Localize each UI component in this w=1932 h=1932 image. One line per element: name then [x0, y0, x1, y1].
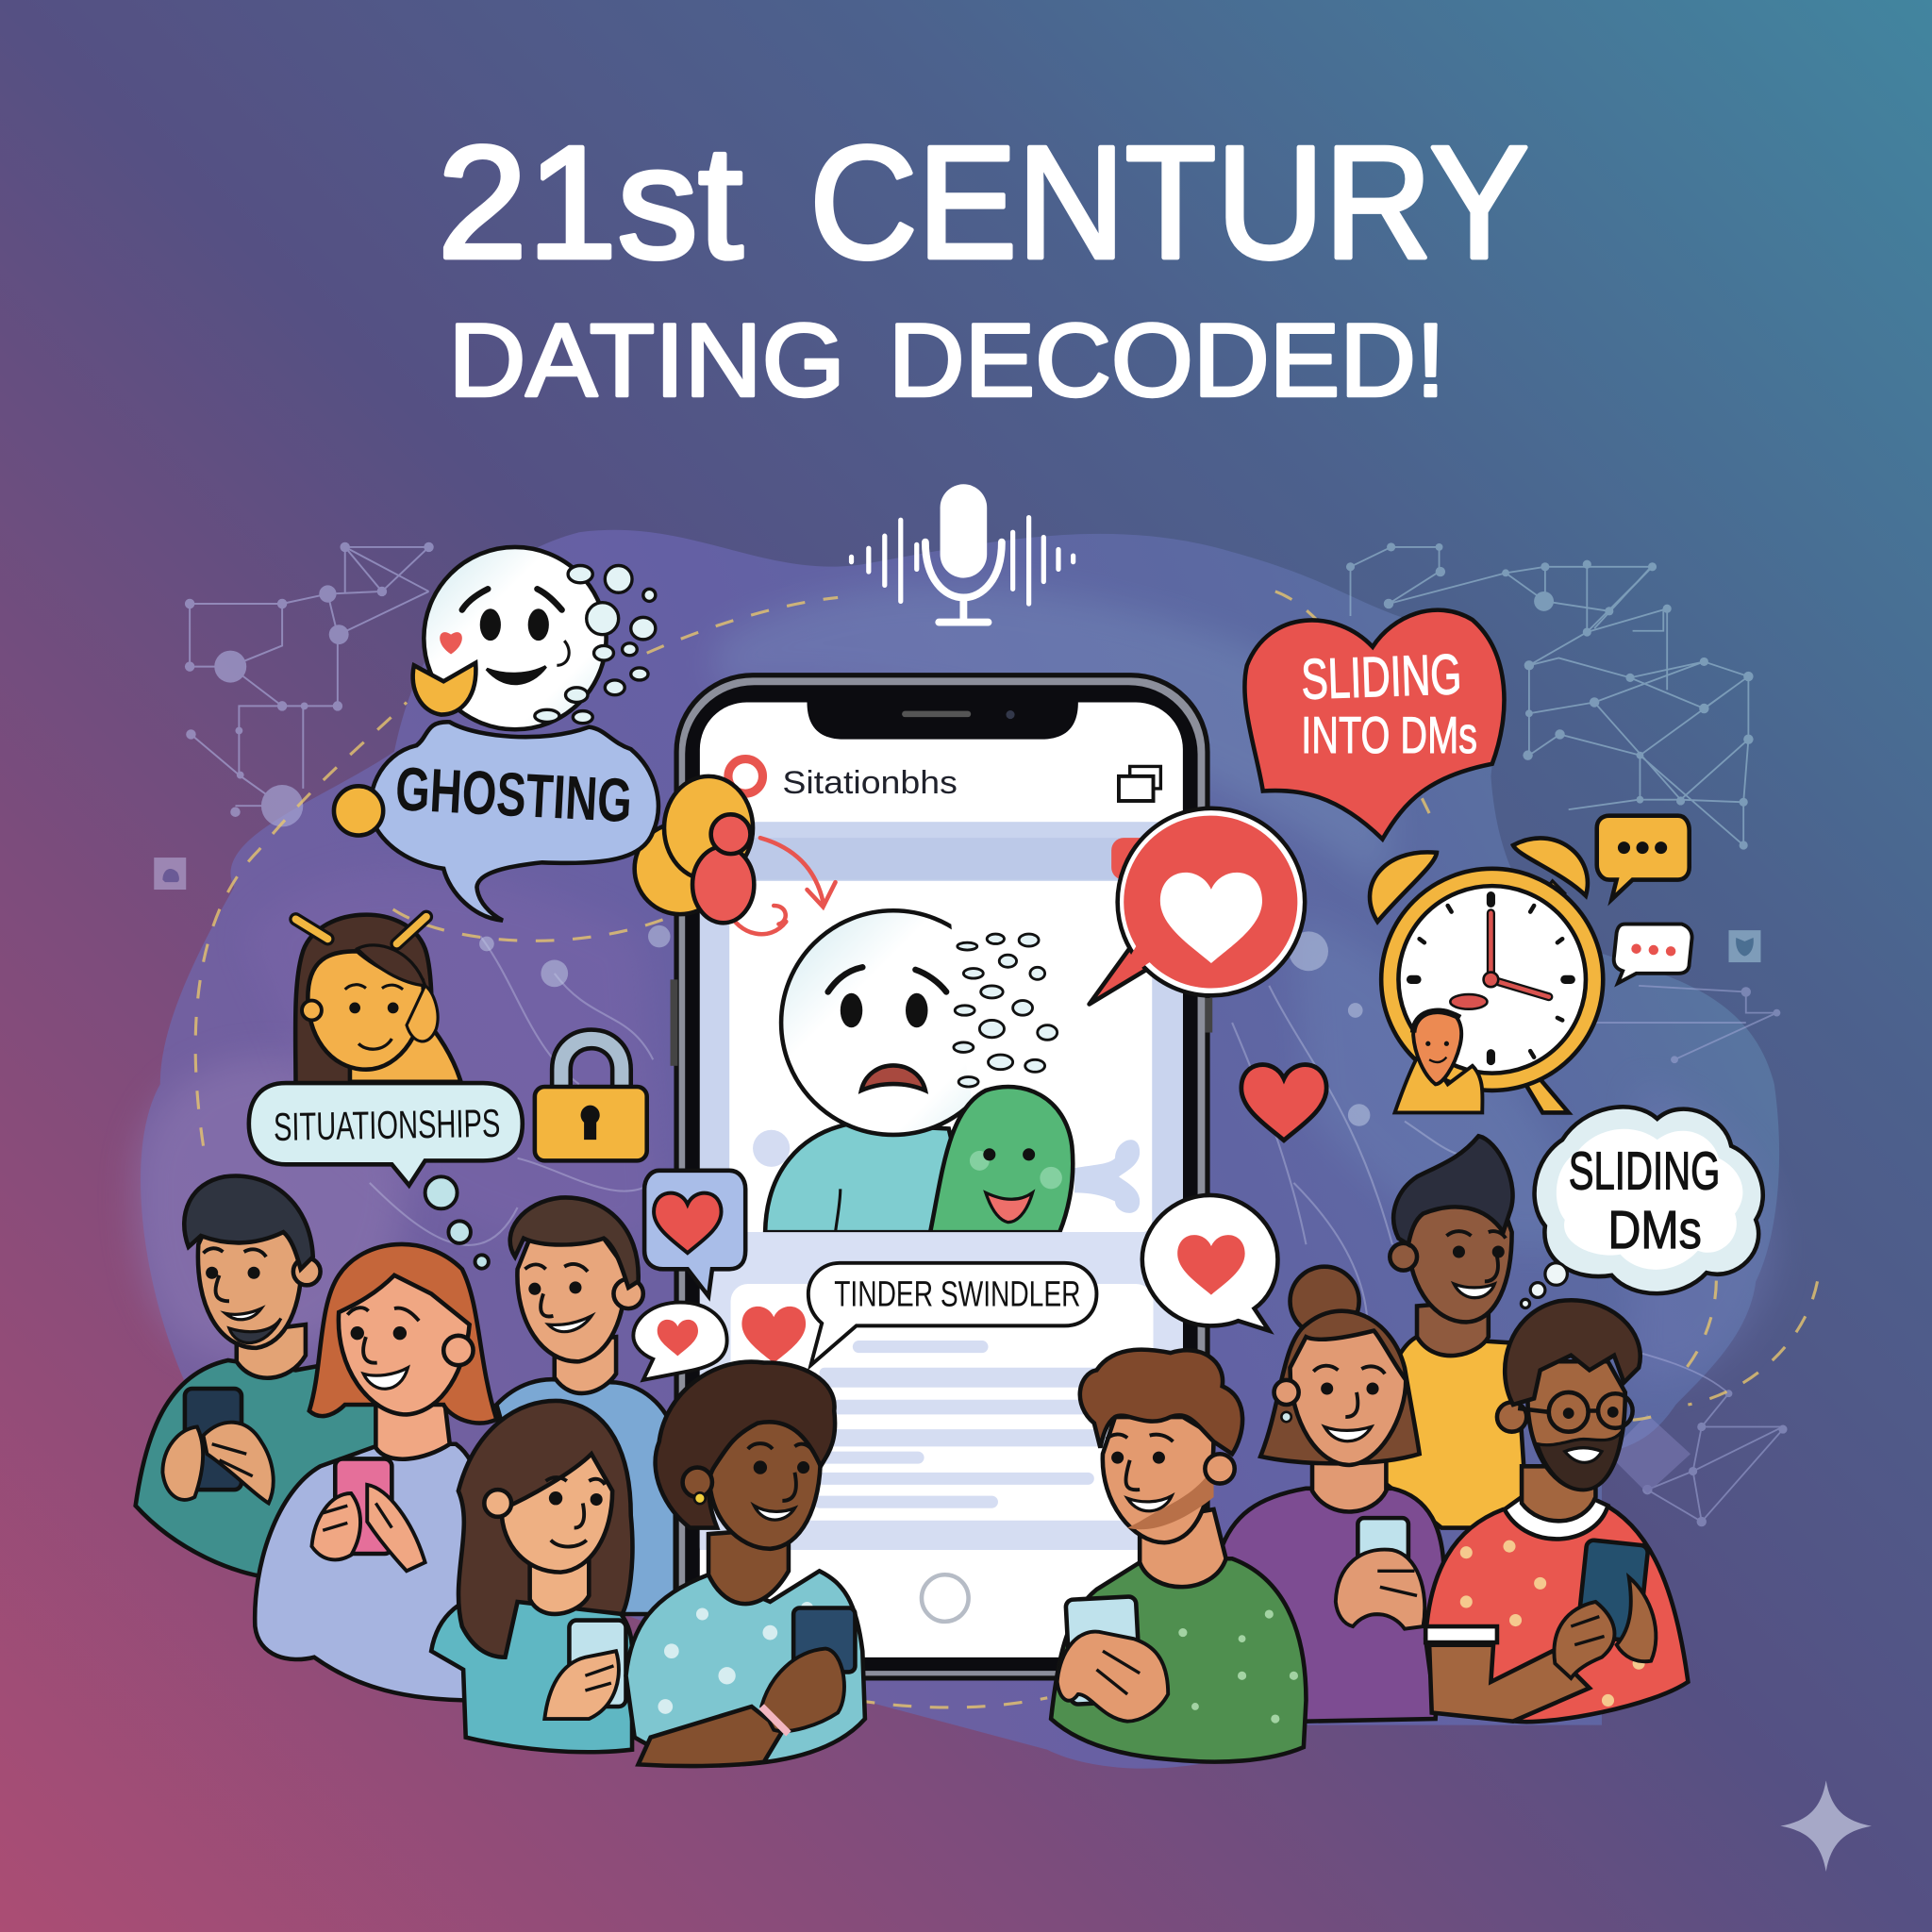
network lower right	[1590, 986, 1788, 1526]
tinder swindler label: TINDER SWINDLER	[834, 1274, 1080, 1314]
ghost character top	[413, 547, 656, 729]
ghosting label: GHOSTING	[394, 754, 634, 835]
red arrows on screen	[727, 838, 836, 934]
sparkle watermark	[1780, 1780, 1872, 1872]
title line one	[438, 112, 1529, 291]
feed heart	[741, 1307, 806, 1363]
icon: padlock	[535, 1030, 647, 1160]
phone	[569, 1621, 626, 1707]
network left	[185, 542, 434, 826]
lower feed panel	[700, 1232, 1183, 1657]
sleeve bands	[1425, 1626, 1497, 1642]
arm	[1429, 1645, 1590, 1722]
small red heart	[1241, 1065, 1326, 1141]
background blob shapes	[135, 530, 1779, 1769]
white chat bubble	[1614, 924, 1692, 983]
title line one: CENTURY	[809, 112, 1529, 291]
dissolving bubbles	[954, 934, 1058, 1087]
phone	[793, 1607, 855, 1672]
right white heart bubble	[1142, 1195, 1277, 1331]
balloons cluster	[635, 776, 754, 923]
green companion	[930, 1087, 1073, 1232]
hands	[311, 1493, 360, 1559]
person: man with glasses and red shirt	[1425, 1300, 1688, 1722]
hand	[544, 1651, 619, 1719]
phone screen	[700, 702, 1183, 1657]
cloud label line one: SLIDING	[1569, 1141, 1720, 1200]
ghosting speech cloud	[334, 722, 658, 921]
person: woman with curly hair and patterned teal shirt	[626, 1362, 865, 1766]
thought bubbles	[425, 1176, 489, 1269]
title line two: DATING	[448, 303, 845, 418]
phone	[335, 1458, 391, 1554]
sad ghost figure	[765, 910, 1073, 1232]
heart label line one: SLIDING	[1300, 642, 1462, 711]
girl with hand to hair	[295, 915, 460, 1084]
person: man with yellow shirt	[1372, 1136, 1528, 1528]
phone	[671, 675, 1212, 1678]
person: red haired woman with lavender top	[255, 1244, 496, 1700]
sliding dms cloud	[1521, 1107, 1763, 1307]
phone	[1066, 1596, 1141, 1705]
alarm clock	[1370, 838, 1603, 1112]
dissolving bubbles	[535, 566, 656, 724]
hands	[162, 1426, 203, 1500]
red heart speech bubble	[1090, 808, 1305, 1004]
yellow chat bubble	[1597, 816, 1690, 899]
yellow tulip	[413, 663, 475, 715]
phone body	[676, 675, 1208, 1678]
notch	[808, 702, 1078, 740]
person: man with blue shirt	[496, 1197, 675, 1614]
title line one: 21st	[438, 112, 743, 291]
hand	[1058, 1632, 1168, 1722]
arm	[639, 1707, 782, 1766]
person: long brown hair woman with teal shirt	[431, 1401, 632, 1752]
phone	[1357, 1518, 1408, 1614]
heart label line two: INTO DMs	[1301, 706, 1477, 764]
phone	[1577, 1540, 1648, 1641]
small white heart bubble	[633, 1303, 727, 1380]
title	[438, 112, 1529, 418]
hand	[1554, 1602, 1614, 1678]
ghost heart cheek	[440, 632, 462, 655]
person: woman with bun and purple top	[1220, 1267, 1444, 1722]
situationships label: SITUATIONSHIPS	[274, 1101, 501, 1149]
tinder swindler bubble	[808, 1263, 1096, 1365]
clock person	[1395, 994, 1487, 1112]
post panel	[700, 822, 1183, 1549]
sliding into dms heart	[1244, 610, 1504, 839]
cloud label line two: DMs	[1607, 1200, 1702, 1259]
app header	[728, 759, 1160, 801]
title line two	[448, 303, 1445, 418]
small square icon left	[154, 858, 186, 890]
hand	[761, 1649, 844, 1731]
phone	[185, 1389, 242, 1490]
dashed connecting lines	[195, 591, 1818, 1707]
home button	[922, 1574, 969, 1622]
title line two: DECODED!	[889, 303, 1445, 418]
hand	[1336, 1550, 1424, 1629]
network right	[1346, 542, 1754, 850]
person: man with dark hair and teal shirt	[136, 1176, 382, 1579]
situationships speech bubble	[249, 1083, 523, 1185]
app header: Sitationbhs	[782, 765, 958, 801]
heart tile bubble	[644, 1171, 745, 1296]
person: curly haired man with green sweater	[1051, 1350, 1306, 1762]
icon: microphone with sound waves	[852, 484, 1074, 623]
small square icon right	[1728, 930, 1760, 962]
